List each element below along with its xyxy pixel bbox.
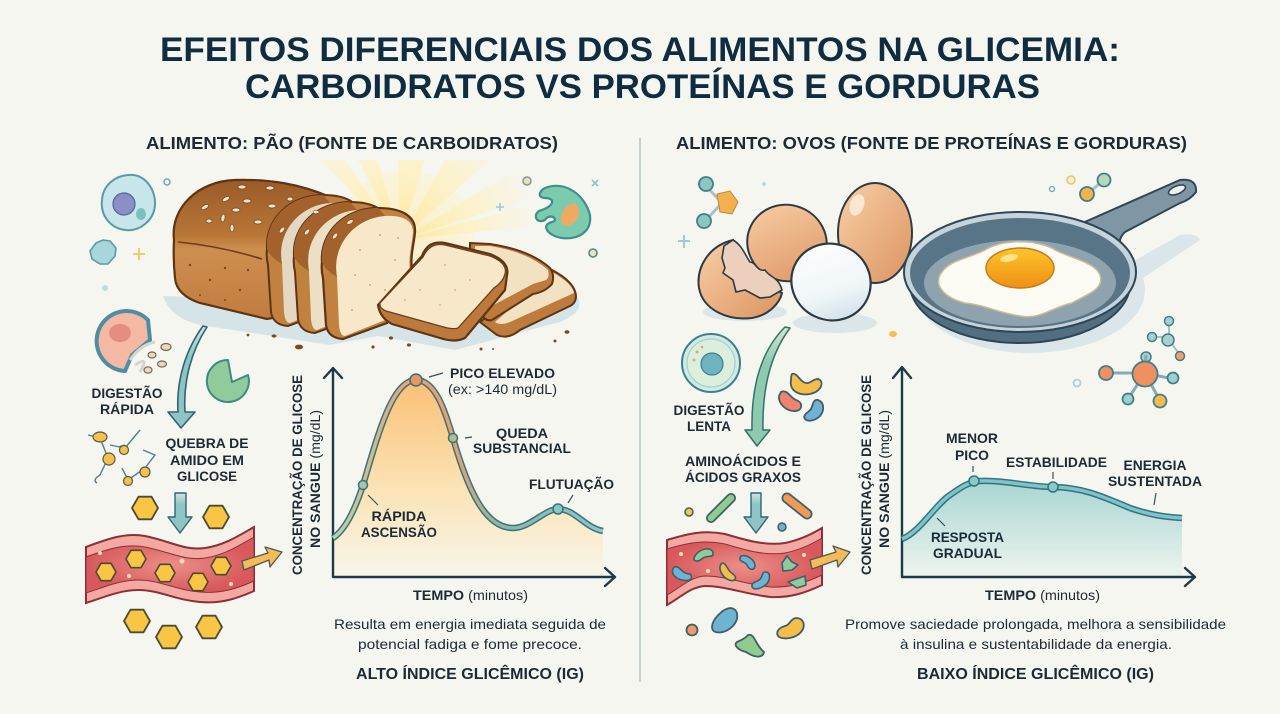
icon: green-blue cell — [682, 334, 740, 392]
label: resposta gradual — [931, 529, 1004, 561]
y axis label: CONCENTRAÇÃO DE GLICOSE — [290, 375, 305, 575]
arrow: para corrente sanguínea — [168, 493, 192, 533]
arrow: para corrente sanguínea — [744, 493, 768, 533]
slices standing — [267, 195, 360, 326]
icon: molecule top-right — [1050, 174, 1110, 201]
label: estabilidade: ESTABILIDADE — [1006, 454, 1107, 470]
label: menor pico — [946, 430, 998, 463]
caption: resultado do pão — [334, 616, 606, 652]
arrow: amarela para gráfico — [242, 547, 282, 570]
chart: glicemia após ovos — [859, 367, 1202, 603]
y axis label: NO SANGUE (mg/dL) — [877, 410, 892, 548]
icon: pink digesting cell — [97, 311, 171, 373]
slices lying — [480, 270, 576, 337]
heading: alimento ovos: ALIMENTO: OVOS (FONTE DE PROTEÍNAS E GORDURAS) — [676, 132, 1187, 153]
x axis label: TEMPO (minutos) — [985, 587, 1100, 603]
label: energia sustentada: ENERGIA — [1124, 457, 1186, 473]
label: digestão lenta: DIGESTÃO — [674, 403, 744, 418]
label: energia sustentada: SUSTENTADA — [1108, 473, 1202, 489]
title — [160, 31, 1120, 106]
label: digestão rápida: RÁPIDA — [100, 402, 154, 417]
label: rápida ascensão: ASCENSÃO — [361, 523, 437, 540]
icon: small germ — [90, 240, 116, 264]
icons: nutrients below — [686, 608, 804, 657]
label: alto índice glicêmico: ALTO ÍNDICE GLICÊMICO (IG) — [356, 664, 584, 683]
label: pico elevado: PICO ELEVADO — [450, 365, 555, 381]
label: pico elevado: (ex: >140 mg/dL) — [448, 381, 557, 397]
label: menor pico: PICO — [955, 447, 989, 463]
icon: molecule small right — [1141, 316, 1184, 362]
leaders — [368, 373, 573, 505]
label: quebra de amido: QUEBRA DE — [166, 436, 248, 451]
label: digestão lenta: LENTA — [687, 419, 731, 434]
label: energia sustentada — [1108, 457, 1202, 489]
main loaf — [174, 180, 345, 319]
y axis label — [859, 375, 892, 575]
label: digestão lenta — [674, 403, 744, 434]
heading: alimento pão: ALIMENTO: PÃO (FONTE DE CARBOIDRATOS) — [146, 132, 558, 153]
label: rápida ascensão: RÁPIDA — [372, 508, 426, 524]
markers — [969, 476, 1058, 492]
area: under curve — [333, 380, 603, 577]
icons: pills — [685, 498, 807, 531]
caption: resultado dos ovos: Promove saciedade prolongada, melhora a sensibilidade — [845, 616, 1226, 632]
caption: resultado do pão: potencial fadiga e fome precoce. — [358, 636, 582, 652]
icon: green bacterium — [496, 177, 598, 257]
panel: ovos (proteínas e gorduras) — [667, 132, 1226, 683]
title: CARBOIDRATOS VS PROTEÍNAS E GORDURAS — [245, 68, 1040, 106]
icon: bread loaf and slices — [163, 160, 580, 350]
label: resposta gradual: RESPOSTA — [931, 529, 1004, 545]
y axis label: CONCENTRAÇÃO DE GLICOSE — [859, 375, 874, 575]
caption: resultado dos ovos: à insulina e sustentabilidade da energia. — [900, 636, 1172, 652]
label: menor pico: MENOR — [946, 430, 998, 446]
arrow: digestão — [168, 326, 207, 428]
label: quebra de amido: AMIDO EM — [170, 453, 244, 468]
caption: resultado do pão: Resulta em energia imediata seguida de — [334, 616, 606, 632]
label: queda substancial — [473, 425, 571, 456]
vessel: aminoácidos no sangue — [667, 528, 822, 605]
axes — [893, 367, 1195, 586]
area: under curve — [902, 481, 1182, 577]
icon: molecule orange — [889, 331, 1178, 408]
caption: resultado dos ovos — [845, 616, 1226, 652]
icon: molecule top-left — [678, 177, 766, 248]
x axis label: TEMPO (minutos) — [413, 587, 528, 603]
label: aminoácidos e ácidos graxos: ÁCIDOS GRAXOS — [685, 470, 801, 485]
axes — [324, 368, 615, 586]
label: quebra de amido — [166, 436, 248, 484]
label: aminoácidos e ácidos graxos: AMINOÁCIDOS E — [685, 454, 801, 469]
vessel: glicose no sangue — [86, 527, 254, 603]
markers — [358, 374, 563, 514]
icons: beans — [779, 374, 823, 421]
icon: frying pan with egg — [904, 180, 1200, 353]
label: digestão rápida: DIGESTÃO — [92, 386, 162, 401]
icons: glucose hexagons above — [132, 497, 229, 528]
icon: plus yellow — [133, 248, 145, 260]
leaders — [937, 466, 1156, 526]
panel: pão (carboidratos) — [86, 132, 615, 683]
label: quebra de amido: GLICOSE — [177, 469, 237, 484]
chart: glicemia após pão — [290, 365, 615, 603]
label: pico elevado — [448, 365, 557, 397]
arrow: amarela para gráfico — [810, 546, 850, 569]
icon: blue cell — [102, 175, 170, 291]
label: flutuação: FLUTUAÇÃO — [529, 475, 614, 492]
icon: eggs — [699, 183, 912, 333]
arrow: digestão lenta — [745, 327, 790, 446]
label: digestão rápida — [92, 386, 162, 417]
label: aminoácidos e ácidos graxos — [685, 454, 801, 485]
label: baixo índice glicêmico: BAIXO ÍNDICE GLICÊMICO (IG) — [917, 664, 1154, 683]
title: EFEITOS DIFERENCIAIS DOS ALIMENTOS NA GLICEMIA: — [160, 31, 1120, 69]
icon: green cell pacman — [207, 360, 249, 402]
line: curve — [902, 481, 1182, 539]
y axis label: NO SANGUE (mg/dL) — [308, 410, 323, 548]
label: resposta gradual: GRADUAL — [933, 545, 1002, 561]
crumbs — [247, 330, 570, 350]
label: queda substancial: QUEDA — [496, 425, 548, 441]
y axis label — [290, 375, 323, 575]
line: curve — [333, 380, 603, 538]
label: rápida ascensão — [361, 508, 437, 540]
icons: glucose hexagons below — [124, 610, 222, 648]
label: queda substancial: SUBSTANCIAL — [473, 440, 571, 456]
icon: starch molecule — [88, 430, 155, 486]
